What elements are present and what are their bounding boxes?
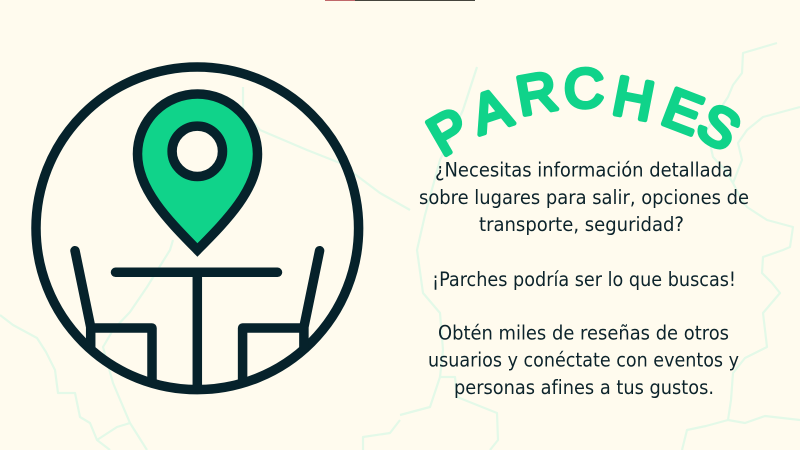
text block: description: usuarios y conéctate con eventos y xyxy=(428,349,739,372)
text block: question xyxy=(419,158,749,236)
text block: question: sobre lugares para salir, opciones de xyxy=(419,186,749,209)
title: PARCHES arched: H xyxy=(608,64,659,133)
text block: question: ¿Necesitas información detallada xyxy=(435,158,733,182)
title: PARCHES arched: A xyxy=(464,76,518,146)
icon: location pin xyxy=(138,94,258,250)
title: PARCHES arched: P xyxy=(417,96,480,168)
title: PARCHES arched: R xyxy=(512,59,562,127)
icon: left chair xyxy=(75,251,152,381)
text block: tagline: ¡Parches podría ser lo que buscas! xyxy=(432,268,736,291)
title: PARCHES arched: C xyxy=(564,57,604,119)
text block: description xyxy=(428,322,739,399)
icon: table with location pin in circle xyxy=(36,67,359,390)
title: PARCHES arched: E xyxy=(655,76,711,147)
icon: table xyxy=(116,272,278,385)
top edge bar xyxy=(325,0,475,1)
text block: question: transporte, seguridad? xyxy=(479,213,684,236)
icon: outer circle xyxy=(36,67,359,390)
text block: description: Obtén miles de reseñas de otros xyxy=(438,322,729,344)
title: PARCHES arched xyxy=(417,57,751,168)
title: PARCHES arched: S xyxy=(687,91,751,163)
text block: description: personas afines a tus gustos. xyxy=(454,376,714,399)
icon: right chair xyxy=(243,251,320,381)
